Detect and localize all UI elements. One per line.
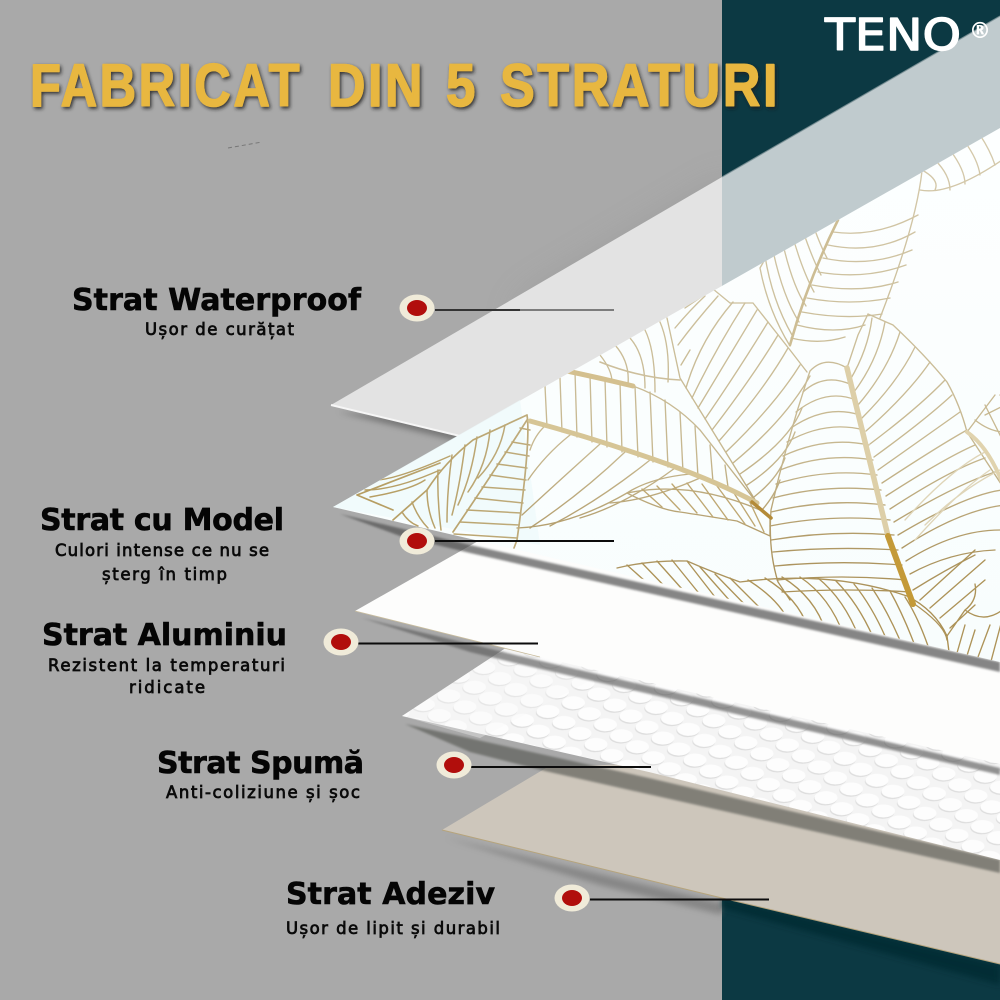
heading: strat aluminiu: Strat Aluminiu	[42, 618, 287, 653]
title: STRATURI	[500, 52, 780, 119]
pointer: adhesive	[554, 884, 769, 912]
callout: waterproof layer	[72, 283, 614, 339]
leaf: upper centre	[667, 289, 807, 503]
layer 5: adhesive sheet	[442, 760, 1000, 985]
layer 3: aluminium sheet	[355, 540, 1000, 775]
heading: strat waterproof: Strat Waterproof	[72, 283, 362, 318]
background: dark teal panel	[722, 0, 1000, 1000]
layer 1: waterproof transparent sheet	[331, 16, 1000, 442]
leaf: top right	[920, 135, 1000, 191]
heading: strat spuma: Strat Spumă	[157, 746, 364, 781]
heading: strat cu model: Strat cu Model	[40, 503, 284, 538]
leaf: bottom	[617, 561, 950, 660]
leaf: bottom right corner	[913, 550, 1000, 665]
logo: TENO: TENO	[824, 10, 961, 61]
layer 2: pattern sheet with golden leaves	[333, 128, 1000, 672]
leaf: top centre	[760, 171, 922, 346]
text: usor de curatat: Ușor de curățat	[145, 320, 295, 339]
pointer: aluminium	[324, 628, 538, 656]
leaf: centre, above main rib	[633, 386, 757, 503]
title: 5	[446, 52, 478, 119]
logo: TENO: ®	[969, 19, 991, 44]
title: FABRICAT	[30, 52, 302, 119]
heading: strat adeziv: Strat Adeziv	[286, 877, 495, 912]
leaf: centre, below main rib	[517, 474, 690, 528]
text: culori intense: Culori intense ce nu se	[55, 541, 269, 560]
text: anti-coliziune: Anti-coliziune și șoc	[166, 783, 360, 802]
text: sterg in timp: șterg în timp	[102, 565, 227, 584]
callout: foam layer	[157, 746, 651, 802]
pointer: waterproof	[400, 294, 614, 322]
text: usor de lipit: Ușor de lipit și durabil	[286, 919, 500, 938]
title	[30, 52, 780, 119]
background: grey panel	[0, 0, 722, 1000]
text: ridicate: ridicate	[129, 678, 205, 697]
leaf: left corner	[357, 415, 528, 548]
main ribs	[530, 421, 757, 503]
layer 4: foam sheet with bubbles	[402, 642, 1000, 873]
title: DIN	[328, 52, 425, 119]
text: rezistent: Rezistent la temperaturi	[48, 656, 285, 675]
pointer: pattern	[400, 528, 614, 554]
callout: pattern layer	[40, 503, 614, 584]
callout: adhesive layer	[286, 877, 769, 938]
leaf: low centre	[627, 489, 770, 536]
callout: aluminium layer	[42, 618, 538, 697]
leaf: big centre right, left half	[770, 362, 847, 600]
leaves artwork	[357, 135, 1000, 665]
leaf: big centre right, right half	[847, 314, 1000, 490]
pointer: foam	[436, 752, 651, 778]
